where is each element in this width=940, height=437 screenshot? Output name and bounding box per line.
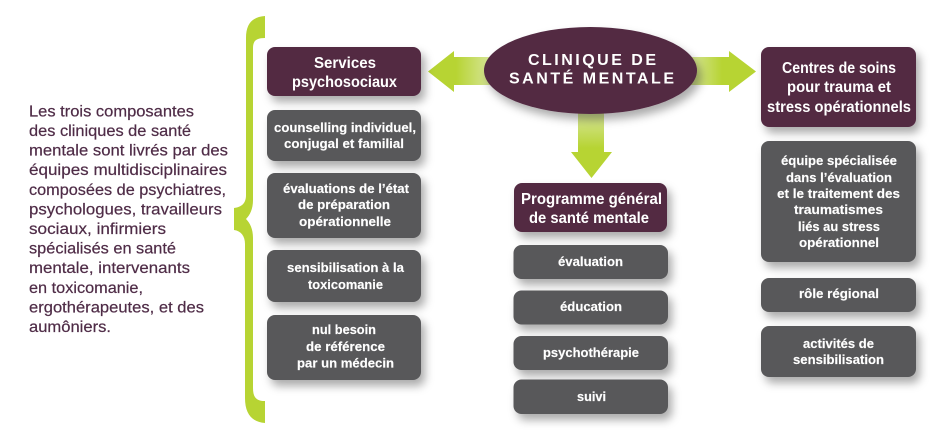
item: équipe spécialisée: liés au stress	[798, 219, 880, 234]
arrow: right to Centres de soins	[690, 51, 756, 92]
item: nul besoin de référence: nul besoin	[312, 322, 376, 337]
item: évaluation	[514, 245, 668, 279]
header: Programme général de santé mentale	[514, 183, 667, 232]
item: équipe spécialisée: traumatismes	[794, 202, 883, 217]
item: équipe spécialisée	[761, 141, 916, 262]
intro text block: mentale sont livrés par des	[29, 143, 228, 160]
item: suivi	[514, 380, 668, 414]
item: activités de sensibilisation	[761, 326, 916, 377]
item: counselling: conjugal et familial	[284, 136, 404, 151]
item: psychothérapie: psychothérapie	[543, 345, 639, 360]
intro text block: Les trois composantes	[29, 104, 194, 120]
central ellipse: Clinique de santé mentale: SANTÉ MENTALE	[509, 68, 674, 88]
header: Programme général de santé mentale: Programme général	[521, 191, 662, 208]
intro text block: mentale, intervenants	[29, 260, 190, 277]
item: évaluations: opérationnelle	[299, 214, 391, 229]
intro text block: spécialisés en santé	[29, 241, 176, 258]
item: sensibilisation à la toxicomanie: sensibilisation à la	[287, 260, 405, 275]
central ellipse: Clinique de santé mentale: CLINIQUE DE	[528, 52, 656, 69]
intro text block	[29, 104, 228, 336]
arrow: down to Programme général	[571, 110, 612, 178]
header: Centres de soins pour trauma et stress opérationnels: Centres de soins	[782, 60, 896, 77]
item: nul besoin de référence	[267, 315, 421, 380]
header: Centres de soins pour trauma et stress opérationnels: stress opérationnels	[767, 99, 911, 116]
item: psychothérapie	[514, 336, 668, 370]
intro text block: ergothérapeutes, et des	[29, 299, 204, 316]
intro text block: composées de psychiatres,	[29, 182, 226, 199]
item: éducation: éducation	[560, 299, 622, 314]
central ellipse: Clinique de santé mentale	[484, 27, 697, 114]
panel: Centres de soins	[761, 47, 916, 377]
header: Services psychosociaux: Services	[314, 55, 376, 72]
header: Services psychosociaux: psychosociaux	[292, 74, 397, 91]
item: activités de sensibilisation: activités de	[803, 336, 874, 351]
item: éducation	[514, 290, 668, 324]
item: sensibilisation à la toxicomanie	[267, 250, 421, 302]
curly brace	[234, 16, 265, 423]
header: Centres de soins pour trauma et stress opérationnels	[761, 47, 916, 127]
intro text block: équipes multidisciplinaires	[29, 162, 227, 179]
intro text block: aumôniers.	[29, 319, 111, 336]
intro text block: psychologues, travailleurs	[29, 201, 222, 218]
item: évaluations: de préparation	[298, 197, 390, 212]
item: évaluations: évaluations de l’état	[283, 181, 410, 196]
panel: Services psychosociaux	[267, 47, 421, 380]
item: activités de sensibilisation: sensibilisation	[793, 352, 884, 367]
item: équipe spécialisée: équipe spécialisée	[781, 153, 897, 168]
intro text block: des cliniques de santé	[29, 123, 191, 140]
panel: Programme général	[514, 183, 668, 414]
intro text block: sociaux, infirmiers	[29, 221, 166, 238]
item: nul besoin de référence: de référence	[306, 339, 385, 354]
item: nul besoin de référence: par un médecin	[297, 356, 394, 370]
item: counselling	[267, 110, 421, 161]
item: rôle régional: rôle régional	[799, 286, 879, 301]
item: équipe spécialisée: et le traitement des	[777, 186, 900, 201]
header: Programme général de santé mentale: de santé mentale	[529, 210, 649, 227]
item: équipe spécialisée: dans l’évaluation	[786, 170, 892, 185]
item: suivi: suivi	[577, 389, 606, 404]
item: évaluation: évaluation	[558, 254, 623, 269]
item: rôle régional	[761, 278, 916, 312]
item: évaluations	[267, 173, 421, 238]
item: counselling: counselling individuel,	[274, 120, 416, 135]
item: équipe spécialisée: opérationnel	[799, 235, 879, 250]
header: Services psychosociaux	[267, 47, 421, 96]
header: Centres de soins pour trauma et stress opérationnels: pour trauma et	[787, 79, 892, 96]
arrow: left to Services psychosociaux	[428, 51, 492, 92]
item: sensibilisation à la toxicomanie: toxicomanie	[308, 277, 383, 292]
intro text block: en toxicomanie,	[29, 280, 143, 297]
